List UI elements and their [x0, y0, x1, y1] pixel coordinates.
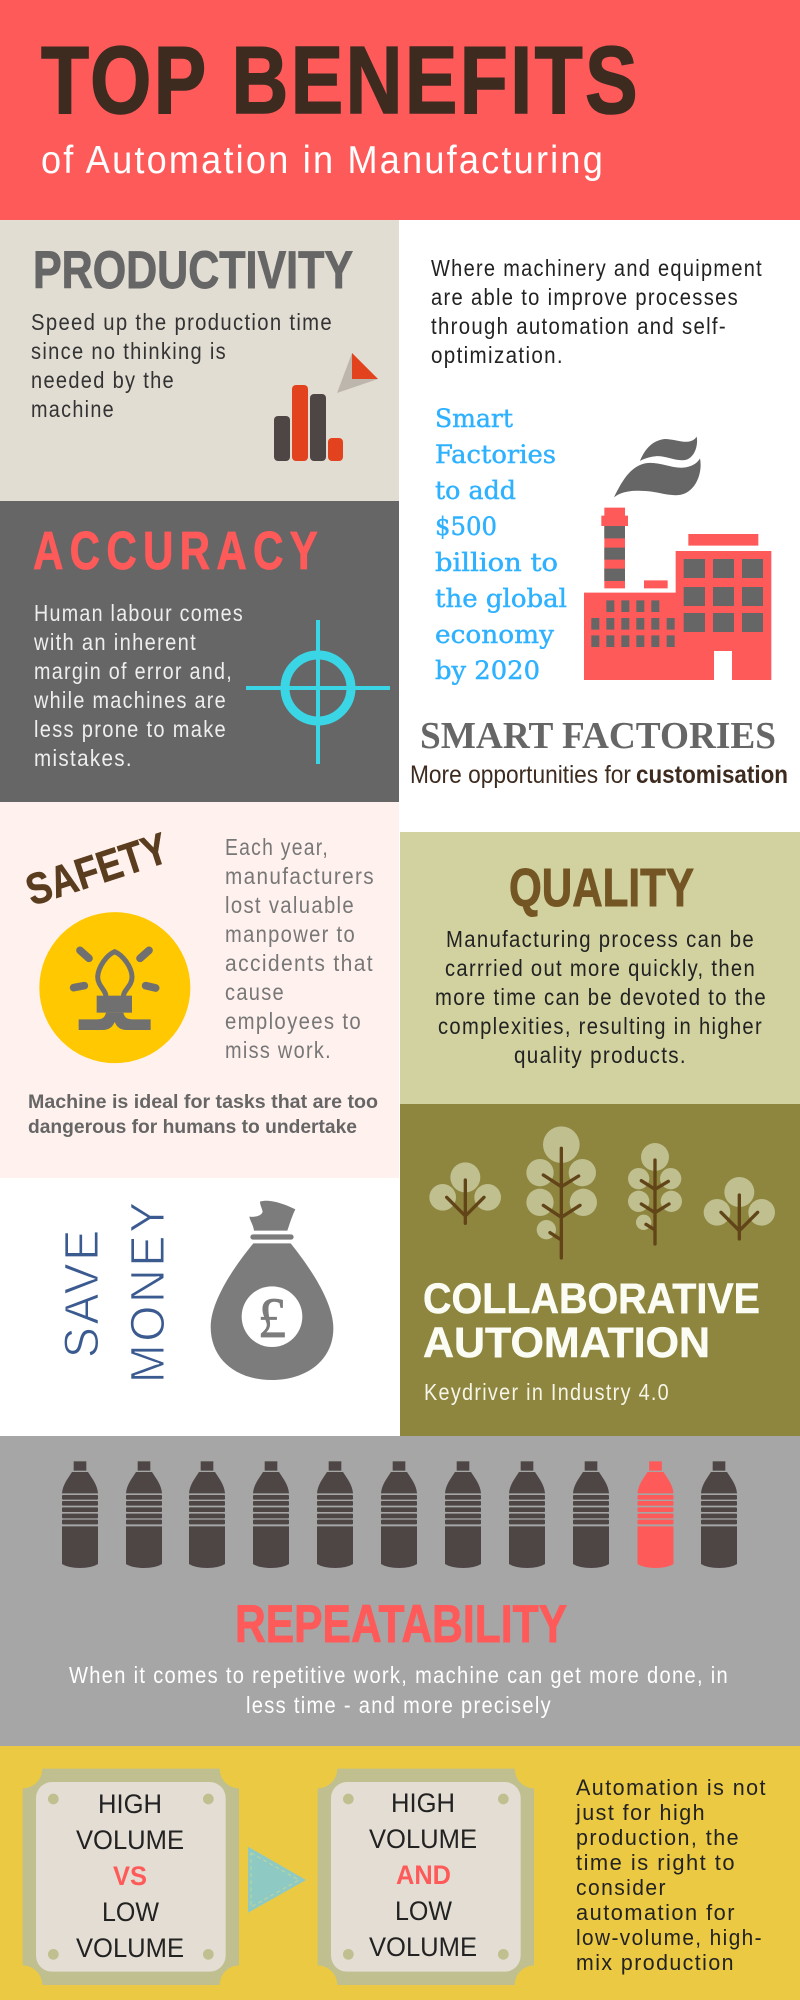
heading: save money: MONEY: [122, 1199, 175, 1383]
text block: quality: Manufacturing process can be: [446, 926, 755, 952]
panel: accuracy: [0, 501, 399, 802]
plaque: high vs low volume: LOW: [102, 1897, 159, 1927]
heading: collaborative automation: AUTOMATION: [423, 1319, 710, 1367]
text block: low-volume automation: time is right to: [576, 1850, 736, 1875]
text block: low-volume automation: low-volume, high-: [576, 1925, 763, 1950]
subtitle: of Automation in Manufacturing: [41, 139, 605, 182]
panel: smart factories: [400, 220, 800, 832]
callout: 500 billion statistic: [435, 404, 567, 685]
callout: 500 billion statistic: billion to: [435, 548, 558, 577]
heading: smart factories: SMART FACTORIES: [420, 715, 776, 757]
plaque: high vs low volume: VOLUME: [76, 1933, 184, 1963]
text block: safety: Each year,: [225, 834, 329, 860]
icon: bar chart with pennant: [274, 353, 378, 461]
text block: quality: [435, 926, 767, 1068]
icon: factory: [584, 437, 771, 680]
text block: safety: [225, 834, 375, 1063]
title: TOP BENEFITS: [41, 27, 640, 134]
text block: productivity: Speed up the production time: [31, 309, 333, 335]
text block: machine ideal: [28, 1092, 378, 1138]
text block: machinery intro: through automation and self-: [431, 313, 727, 339]
icon: money bag: [211, 1201, 333, 1380]
text block: accuracy: mistakes.: [34, 745, 133, 771]
text block: accuracy: while machines are: [33, 687, 227, 713]
callout: 500 billion statistic: Smart: [435, 404, 513, 433]
heading: accuracy: ACCURACY: [33, 521, 324, 581]
text block: machinery intro: are able to improve processes: [431, 284, 739, 310]
text block: customisation: [410, 761, 788, 789]
panel: volume: [0, 1746, 800, 2000]
text block: machine ideal: Machine is ideal for tasks that are too: [28, 1092, 378, 1113]
plaque: high and low volume: VOLUME: [369, 1824, 477, 1854]
text block: safety: miss work.: [225, 1037, 332, 1063]
text block: accuracy: with an inherent: [33, 629, 197, 655]
text block: repeatability: [69, 1662, 729, 1718]
panel: collaborative automation: [400, 1104, 800, 1436]
text block: productivity: since no thinking is: [31, 338, 227, 364]
text block: productivity: machine: [31, 396, 115, 422]
icon: light bulb in yellow circle: [39, 912, 190, 1063]
text block: quality: quality products.: [514, 1042, 687, 1068]
callout: 500 billion statistic: $500: [435, 512, 497, 541]
text block: quality: carrried out more quickly, then: [445, 955, 756, 981]
text block: machinery intro: [431, 255, 763, 368]
text block: accuracy: Human labour comes: [34, 600, 244, 626]
text block: accuracy: [33, 600, 244, 771]
text block: repeatability: less time - and more precisely: [246, 1692, 552, 1718]
plaque: high and low volume: HIGH: [391, 1788, 455, 1818]
plaque: high and low volume: [318, 1769, 534, 1985]
text block: low-volume automation: production, the: [576, 1825, 740, 1850]
panel: repeatability: [0, 1436, 800, 1746]
text block: low-volume automation: just for high: [575, 1800, 706, 1825]
plaque: high and low volume: VOLUME: [369, 1932, 477, 1962]
text block: machinery intro: optimization.: [431, 342, 564, 368]
arrow: [248, 1847, 306, 1913]
icon: crosshair target: [246, 620, 390, 764]
text block: keydriver: Keydriver in Industry 4.0: [424, 1379, 670, 1405]
panel: productivity: [0, 220, 399, 501]
plaque: high vs low volume: [23, 1769, 239, 1985]
text block: low-volume automation: Automation is not: [576, 1775, 767, 1800]
text block: low-volume automation: consider: [576, 1875, 667, 1900]
icon: row of bottles: [62, 1461, 737, 1568]
callout: 500 billion statistic: to add: [435, 476, 516, 505]
panel: safety: [0, 802, 399, 1178]
callout: 500 billion statistic: economy: [435, 620, 555, 649]
heading: collaborative automation: [423, 1275, 760, 1367]
heading: quality: QUALITY: [509, 858, 694, 918]
icon: money bag: £: [258, 1287, 286, 1350]
plaque: high vs low volume: VOLUME: [76, 1825, 184, 1855]
text block: low-volume automation: [575, 1775, 767, 1975]
callout: 500 billion statistic: by 2020: [435, 656, 540, 685]
text block: machine ideal: dangerous for humans to undertake: [28, 1117, 357, 1138]
heading: collaborative automation: COLLABORATIVE: [423, 1275, 760, 1323]
callout: 500 billion statistic: the global: [435, 584, 567, 613]
text block: customisation: More opportunities for: [410, 761, 631, 789]
callout: 500 billion statistic: Factories: [435, 440, 556, 469]
text block: safety: cause: [225, 979, 285, 1005]
text block: safety: accidents that: [225, 950, 374, 976]
text block: quality: complexities, resulting in higher: [438, 1013, 763, 1039]
text block: safety: employees to: [225, 1008, 362, 1034]
plaque: high vs low volume: HIGH: [98, 1789, 162, 1819]
heading: repeatability: REPEATABILITY: [235, 1595, 567, 1654]
text block: accuracy: margin of error and,: [34, 658, 233, 684]
panel: save money: [0, 1178, 400, 1436]
plaque: high and low volume: LOW: [395, 1896, 452, 1926]
text block: safety: manufacturers: [225, 863, 375, 889]
heading: safety: SAFETY: [20, 824, 174, 916]
text block: productivity: [31, 309, 333, 422]
text block: low-volume automation: automation for: [576, 1900, 736, 1925]
text block: safety: lost valuable: [225, 892, 355, 918]
text block: low-volume automation: mix production: [576, 1950, 735, 1975]
text block: productivity: needed by the: [31, 367, 175, 393]
heading: productivity: PRODUCTIVITY: [33, 241, 353, 300]
plaque: high and low volume: AND: [396, 1860, 451, 1890]
heading: save money: SAVE: [56, 1227, 109, 1358]
plaque: high vs low volume: VS: [113, 1861, 147, 1891]
heading: save money: [56, 1199, 175, 1383]
text block: safety: manpower to: [225, 921, 356, 947]
icon: row of trees: [429, 1126, 775, 1258]
text block: accuracy: less prone to make: [34, 716, 227, 742]
panel: header: [0, 0, 800, 220]
panel: quality: [400, 832, 800, 1104]
